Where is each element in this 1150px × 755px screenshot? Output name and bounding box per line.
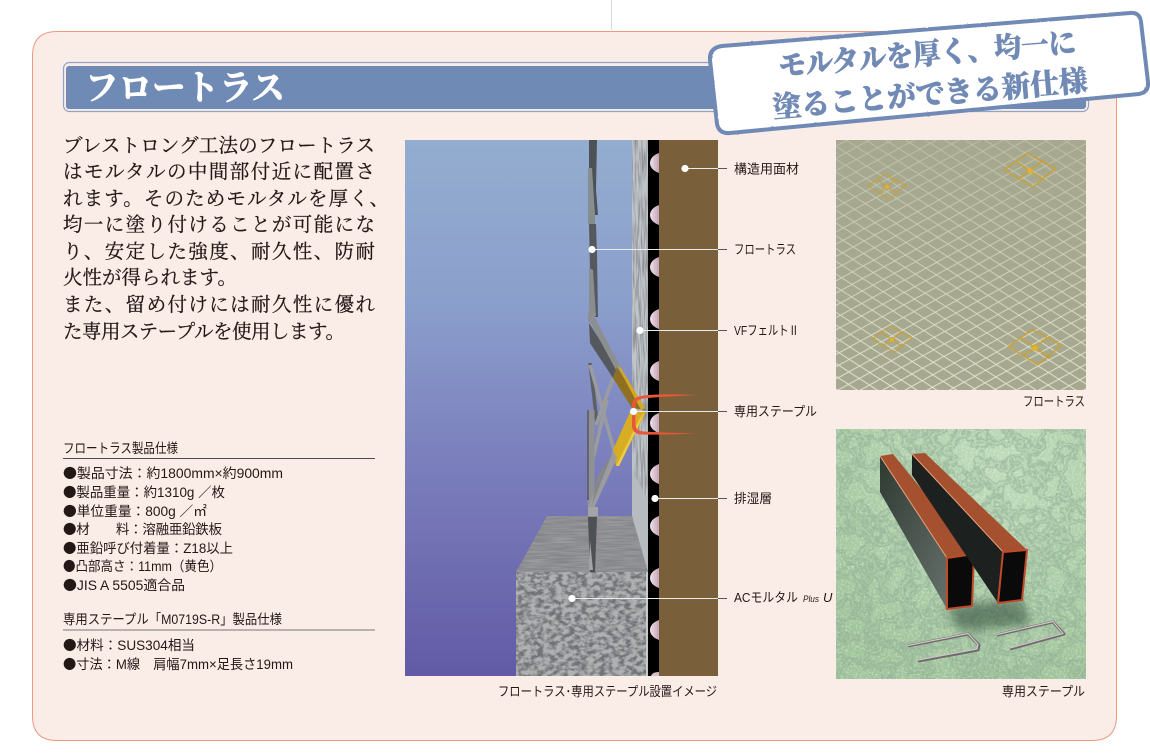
callout text bbox=[771, 25, 1089, 124]
spec: float lath: ●製品寸法：約1800mm×約900mm bbox=[63, 462, 283, 482]
diagram labels: 専用ステープル bbox=[734, 404, 817, 419]
photo: float lath mesh bbox=[836, 140, 1086, 390]
leader dots bbox=[568, 165, 689, 602]
mortar base: top face bbox=[516, 470, 648, 572]
diagram labels: ACモルタル bbox=[734, 590, 798, 605]
spec: float lath: ●凸部高さ：11mm（黄色） bbox=[63, 555, 222, 575]
loose staple left bbox=[908, 634, 979, 661]
staple block right bbox=[912, 453, 1027, 603]
diagram: installation cross-section bbox=[405, 140, 727, 676]
spec: float lath: ●JIS A 5505適合品 bbox=[63, 574, 185, 594]
spec heading: フロートラス製品仕様 bbox=[63, 441, 178, 456]
callout text: 塗ることができる新仕様 bbox=[771, 65, 1089, 124]
spec: float lath: ●材 料：溶融亜鉛鉄板 bbox=[63, 518, 222, 538]
photo caption: フロートラス bbox=[1023, 394, 1085, 409]
mortar base: front face bbox=[516, 572, 648, 676]
layer: felt bbox=[632, 140, 648, 676]
diagram labels: フロートラス bbox=[734, 242, 796, 257]
heading bar bbox=[64, 62, 1088, 112]
diagram labels bbox=[734, 162, 833, 605]
spec: staple: ●寸法：M線 肩幅7mm×足長さ19mm bbox=[63, 653, 293, 673]
spec: staple: ●材料：SUS304相当 bbox=[63, 634, 195, 654]
diagram labels: U bbox=[823, 590, 833, 605]
layer: drainage black bbox=[648, 140, 659, 676]
lath bottom edge bbox=[588, 517, 597, 572]
spec: float lath bbox=[63, 441, 375, 594]
photo: staples bbox=[836, 429, 1086, 679]
intro paragraph: り、安定した強度、耐久性、防耐 bbox=[63, 241, 375, 263]
spec: float lath: ●亜鉛呼び付着量：Z18以上 bbox=[63, 537, 233, 557]
intro paragraph: れます。そのためモルタルを厚く、 bbox=[63, 188, 389, 210]
intro paragraph: また、留め付けには耐久性に優れ bbox=[63, 294, 375, 316]
intro paragraph: はモルタルの中間部付近に配置さ bbox=[63, 161, 375, 183]
diagram caption: フロートラス･専用ステープル設置イメージ bbox=[498, 684, 717, 699]
diagram labels: 構造用面材 bbox=[734, 162, 799, 176]
spec heading: 専用ステープル「M0719S-R」製品仕様 bbox=[63, 612, 282, 627]
leaders bbox=[572, 168, 727, 598]
top crop line bbox=[610, 0, 612, 30]
intro paragraph: た専用ステープルを使用します。 bbox=[63, 321, 345, 343]
spec: staple bbox=[63, 612, 375, 673]
staple block left bbox=[880, 454, 974, 609]
spec: float lath: ●単位重量：800g ／㎡ bbox=[63, 500, 207, 520]
float lath bbox=[588, 140, 646, 517]
diagram labels: VFフェルトⅡ bbox=[734, 323, 799, 338]
staple bbox=[632, 394, 696, 435]
shadow bbox=[945, 598, 1030, 632]
diagram labels: 排湿層 bbox=[734, 491, 772, 506]
intro paragraph: 火性が得られます。 bbox=[63, 267, 237, 289]
diagram labels: Plus bbox=[803, 594, 819, 604]
layer: structural board bbox=[659, 140, 718, 676]
yellow bosses bbox=[868, 153, 1062, 365]
drainage bumps bbox=[650, 153, 659, 676]
intro paragraph: 均一に塗り付けることが可能にな bbox=[63, 214, 375, 236]
spec: float lath: ●製品重量：約1310g ／枚 bbox=[63, 481, 225, 501]
intro paragraph bbox=[63, 135, 389, 343]
heading text: フロートラス bbox=[85, 69, 285, 108]
callout: rotated note bbox=[710, 13, 1148, 133]
loose staple right bbox=[997, 622, 1064, 649]
photo caption: 専用ステープル bbox=[1002, 684, 1085, 699]
intro paragraph: ブレストロング工法のフロートラス bbox=[63, 135, 375, 157]
callout text: モルタルを厚く、均一に bbox=[777, 25, 1077, 83]
